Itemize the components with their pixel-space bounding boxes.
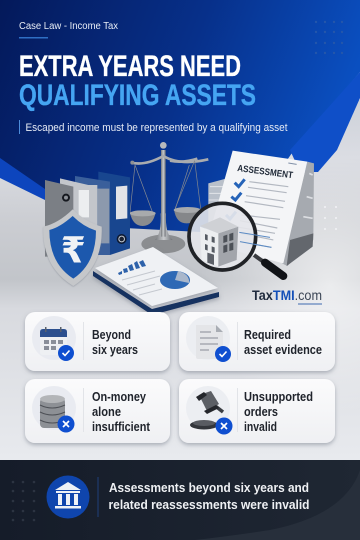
bar chart	[118, 260, 146, 275]
background: light floor	[0, 100, 360, 460]
label: invalid	[244, 420, 277, 434]
icon: gavel with cross	[186, 386, 232, 434]
icon: coins with cross	[32, 386, 76, 432]
label	[244, 390, 313, 434]
icon: calendar with check	[32, 316, 76, 361]
checklist	[226, 179, 288, 247]
label: six years	[92, 343, 138, 357]
icon: courthouse	[46, 476, 90, 518]
footer message: Assessments beyond six years and	[109, 480, 309, 495]
title	[19, 50, 256, 112]
icon: rupee shield: ₹	[61, 231, 86, 272]
icon: magnifying glass with building	[189, 203, 283, 276]
assessment document	[207, 151, 314, 266]
eyebrow underline	[19, 37, 48, 38]
label: Unsupported	[244, 390, 313, 404]
dots: right of document	[324, 206, 337, 230]
icon: binders	[45, 172, 130, 257]
icon: scales of justice	[130, 142, 208, 253]
footer band	[0, 460, 360, 540]
card: required asset evidence	[179, 312, 335, 371]
clipboard report with charts	[93, 247, 219, 315]
footer message: related reassessments were invalid	[108, 497, 310, 512]
eyebrow: case law label: Case Law - Income Tax	[19, 21, 118, 32]
label: Beyond	[92, 328, 131, 342]
label: On-money	[92, 390, 146, 404]
background: blue header shape	[0, 0, 360, 232]
icon: rupee shield	[43, 209, 102, 286]
icon: right pan of scales	[170, 159, 202, 223]
label: insufficient	[92, 420, 151, 434]
icon: document with check	[186, 316, 231, 362]
card: unsupported orders invalid	[179, 379, 335, 443]
title: EXTRA YEARS NEED	[19, 50, 241, 83]
label	[244, 328, 322, 357]
subtitle: Escaped income must be represented by a qualifying asset	[26, 122, 288, 134]
heading: assessment: ASSESSMENT	[237, 163, 294, 180]
logo: TaxTMI.com: TaxTMI.com	[252, 287, 322, 303]
card: beyond six years	[25, 312, 170, 371]
label	[92, 328, 138, 357]
label: asset evidence	[244, 343, 322, 357]
title: QUALIFYING ASSETS	[19, 79, 256, 112]
card: on-money alone insufficient	[25, 379, 170, 443]
label: Required	[244, 328, 291, 342]
building	[200, 217, 238, 267]
label: orders	[244, 405, 278, 419]
dots: footer	[12, 481, 35, 521]
footer message	[108, 480, 310, 512]
pie chart	[160, 271, 190, 289]
label: alone	[92, 405, 121, 419]
label	[92, 390, 151, 434]
dots: top right	[315, 21, 343, 54]
